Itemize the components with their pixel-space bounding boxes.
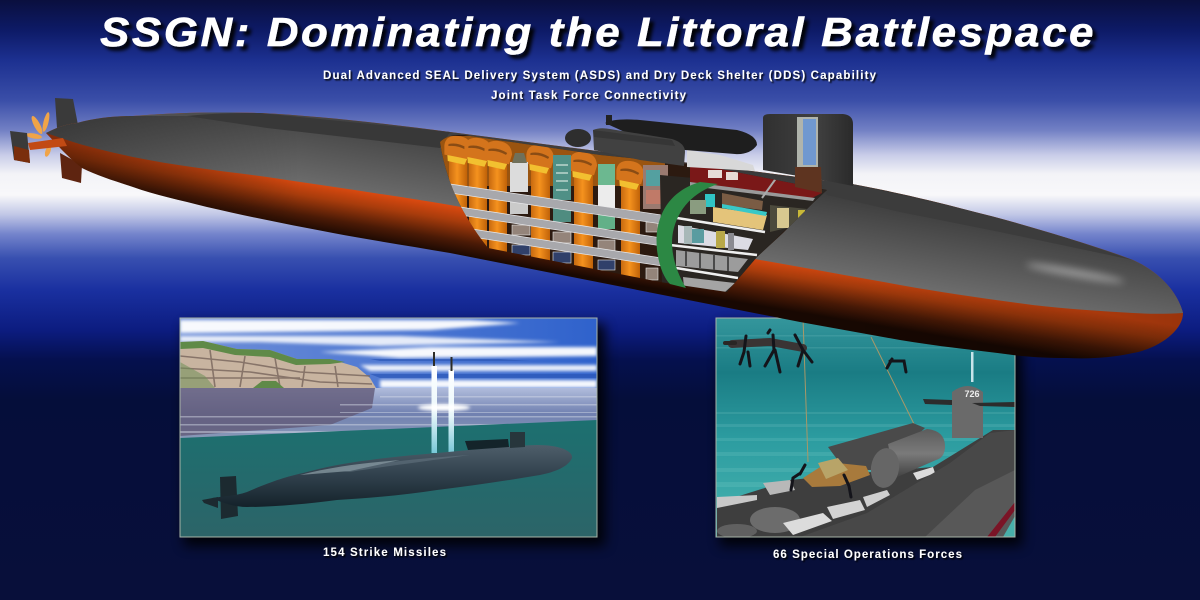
icon: dry deck shelter: [803, 423, 945, 490]
panel: strike missiles scene: [180, 318, 605, 546]
icon: divers: [725, 330, 906, 497]
cutaway interior: [440, 134, 827, 292]
lower berthing compartments: [512, 222, 658, 280]
missile deck ridge: [187, 113, 450, 148]
caption: special operations forces: 66 Special Operations Forces: [773, 549, 962, 561]
green and white canister: [598, 164, 615, 229]
icon: stern plane: [28, 138, 67, 150]
control room decks: [670, 193, 807, 292]
icon: guide lines: [803, 318, 918, 462]
red upper level: [690, 165, 822, 201]
icon: submerged submarine: [202, 432, 572, 519]
cliff reflection: [180, 388, 375, 436]
icon: stern control surfaces and propeller: [10, 98, 82, 183]
teal lockout canister: [553, 155, 571, 222]
icon: advanced SEAL delivery system capsules: [565, 115, 757, 166]
icon: sail with hull number: [923, 352, 1015, 438]
hull: orange lower section: [46, 112, 1183, 358]
main submarine hull: [46, 112, 1183, 358]
forward compartment: [660, 175, 827, 292]
icon: sail / fairwater: [763, 114, 853, 193]
subtitle: Dual Advanced SEAL Delivery System (ASDS) and Dry Deck Shelter (DDS) Capability: [323, 70, 877, 82]
icon: submarine deck: [717, 430, 1015, 537]
stern shading: [46, 116, 300, 222]
white canister: [510, 153, 528, 214]
panel: special operations scene: [716, 318, 1022, 546]
hull: nose orange shading: [780, 262, 1183, 358]
subtitle: [323, 70, 877, 102]
deck bands: [450, 184, 662, 266]
green hull frame ring: [657, 182, 718, 288]
nose highlight: [1025, 260, 1125, 286]
icon: missile launch plumes: [418, 352, 470, 453]
subtitle: Joint Task Force Connectivity: [491, 90, 687, 102]
equipment canister: [643, 165, 668, 209]
icon: superstructure pipework: [687, 150, 755, 171]
hull: gray upper section: [46, 112, 1183, 314]
icon: sail with hull number: 726: [964, 389, 980, 399]
icon: coastal cliff: [180, 341, 376, 388]
missile tubes: [443, 135, 645, 290]
icon: hull side: [800, 430, 1015, 537]
title: SSGN: Dominating the Littoral Battlespace: [100, 9, 1096, 55]
icon: deck patches: [717, 467, 935, 538]
caption: strike missiles: 154 Strike Missiles: [323, 547, 446, 559]
